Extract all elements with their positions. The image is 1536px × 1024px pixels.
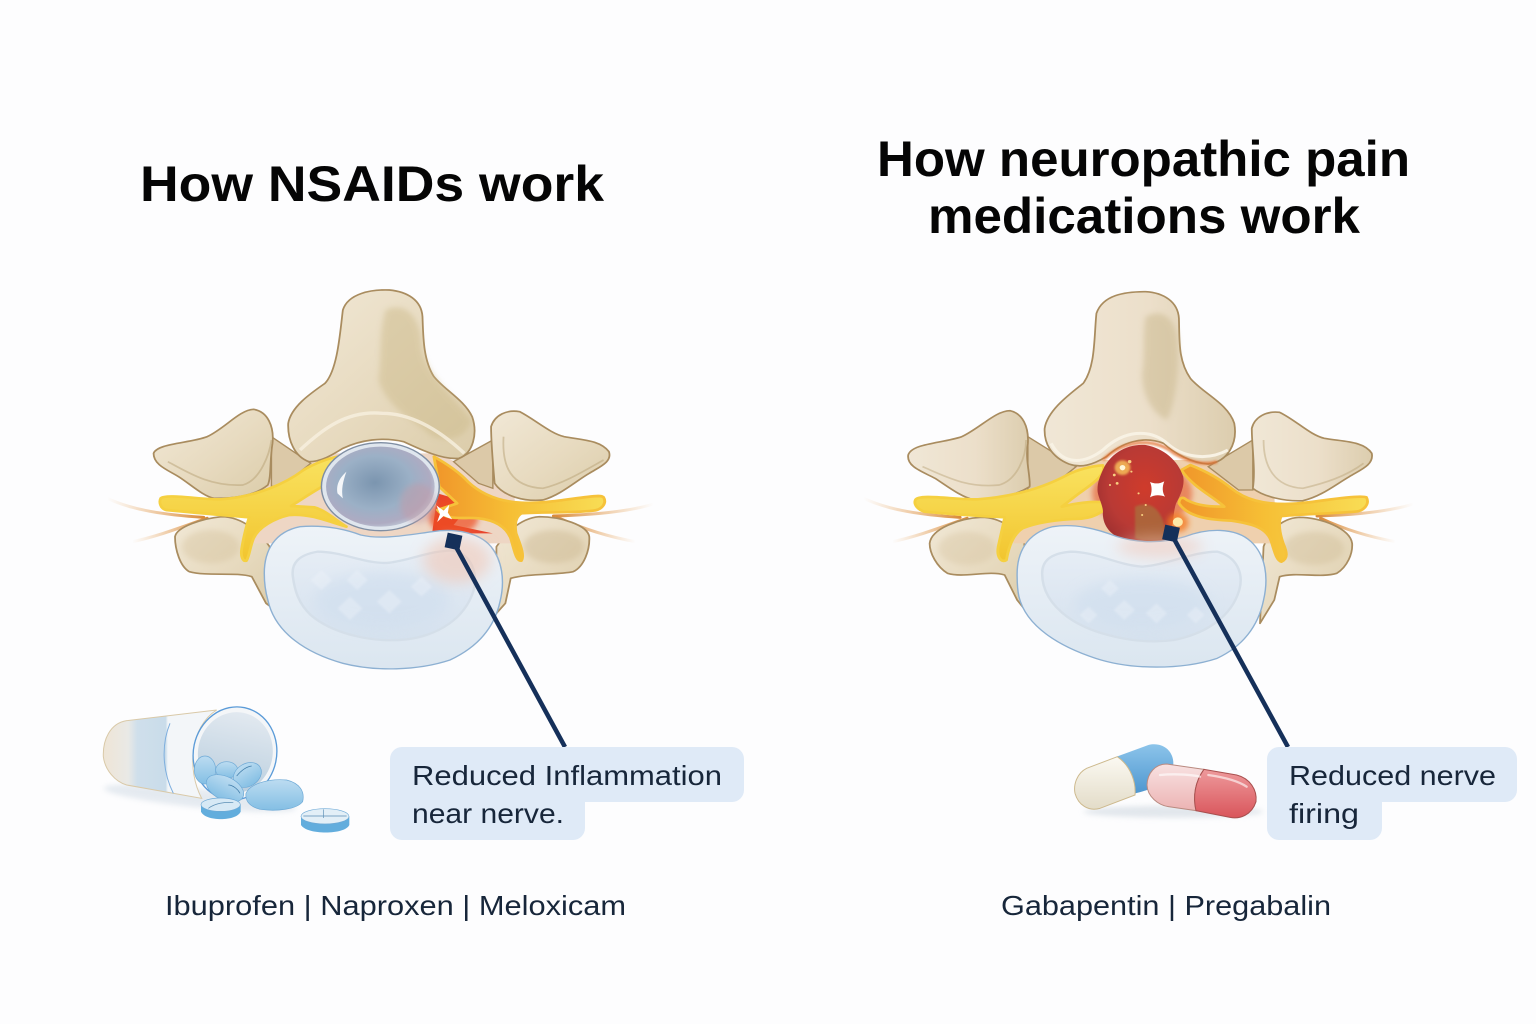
tablets in bottle: [194, 756, 303, 810]
blue and white capsule: [1075, 744, 1173, 809]
herniated red cord: [1097, 445, 1189, 541]
vertebral disc, right panel: [1017, 526, 1266, 667]
inflammation glow: [429, 493, 493, 535]
nerve wisps right panel: [864, 498, 1414, 542]
heading: How neuropathic pain medications work: How neuropathic pain: [877, 131, 1410, 187]
pain spark: [436, 505, 452, 522]
spinous process and lamina, right panel: [1045, 292, 1235, 466]
text: neuropathic medications: Gabapentin | Pregabalin: [1001, 890, 1331, 921]
panel: neuropathic spine illustration: [864, 292, 1414, 667]
pedicles: [271, 437, 493, 488]
tablet 1: [201, 798, 241, 819]
bottle interior: [190, 705, 280, 800]
bone shading: [168, 307, 604, 488]
heading: How NSAIDs work: How NSAIDs work: [140, 156, 604, 212]
callout: Reduced nerve firing: Reduced nerve: [1289, 760, 1496, 791]
lower bone processes: [175, 517, 589, 613]
nerve root right: [434, 457, 605, 561]
spinous process and lamina: [288, 290, 475, 462]
label edge: [164, 723, 173, 793]
bottle shadow: [103, 779, 297, 818]
heading: How neuropathic pain medications work: medications work: [928, 188, 1360, 244]
icon: spilled pill bottle: [103, 699, 349, 832]
leader line: neuropathic callout: [1162, 525, 1288, 747]
canal tissue right panel: [1010, 460, 1278, 543]
nerve spark: [1150, 481, 1165, 497]
lower bone processes right panel: [930, 517, 1352, 623]
nerve root right, right panel: [1179, 465, 1367, 562]
nerve wisps left side: [107, 498, 654, 542]
transverse process right: [491, 411, 610, 500]
nerve root left, right panel: [915, 465, 1106, 561]
callout: Reduced nerve firing: [1267, 747, 1517, 840]
transverse process left: [154, 409, 273, 498]
capsule shadow: [1083, 806, 1263, 818]
pedicles right panel: [1028, 437, 1253, 490]
panel: NSAID spine illustration: [107, 290, 654, 669]
callout: Reduced Inflammation: near nerve.: [412, 798, 564, 829]
bottle mouth: [185, 699, 285, 808]
callout: Reduced Inflammation: Reduced Inflammation: [412, 760, 722, 791]
red glow behind herniation: [1092, 460, 1192, 527]
bottle body: [103, 710, 217, 798]
transverse process left, right panel: [908, 411, 1030, 500]
icon: capsules: [1075, 744, 1263, 818]
text: NSAID medications: Ibuprofen | Naproxen | Meloxicam: [165, 890, 626, 921]
transverse process right, right panel: [1252, 412, 1372, 501]
heading: How neuropathic pain medications work: [877, 131, 1410, 244]
leader line: NSAID callout: [445, 533, 565, 747]
pink and red capsule: [1147, 764, 1256, 818]
canal tissue: [250, 453, 518, 543]
vertebral disc: [264, 526, 502, 669]
callout: Reduced Inflammation: [390, 747, 744, 840]
tablet 2: [301, 809, 349, 832]
bone shading, right panel: [922, 313, 1364, 488]
callout: Reduced nerve firing: firing: [1289, 798, 1359, 829]
spinal cord: [321, 443, 439, 531]
nerve root left: [160, 457, 346, 561]
